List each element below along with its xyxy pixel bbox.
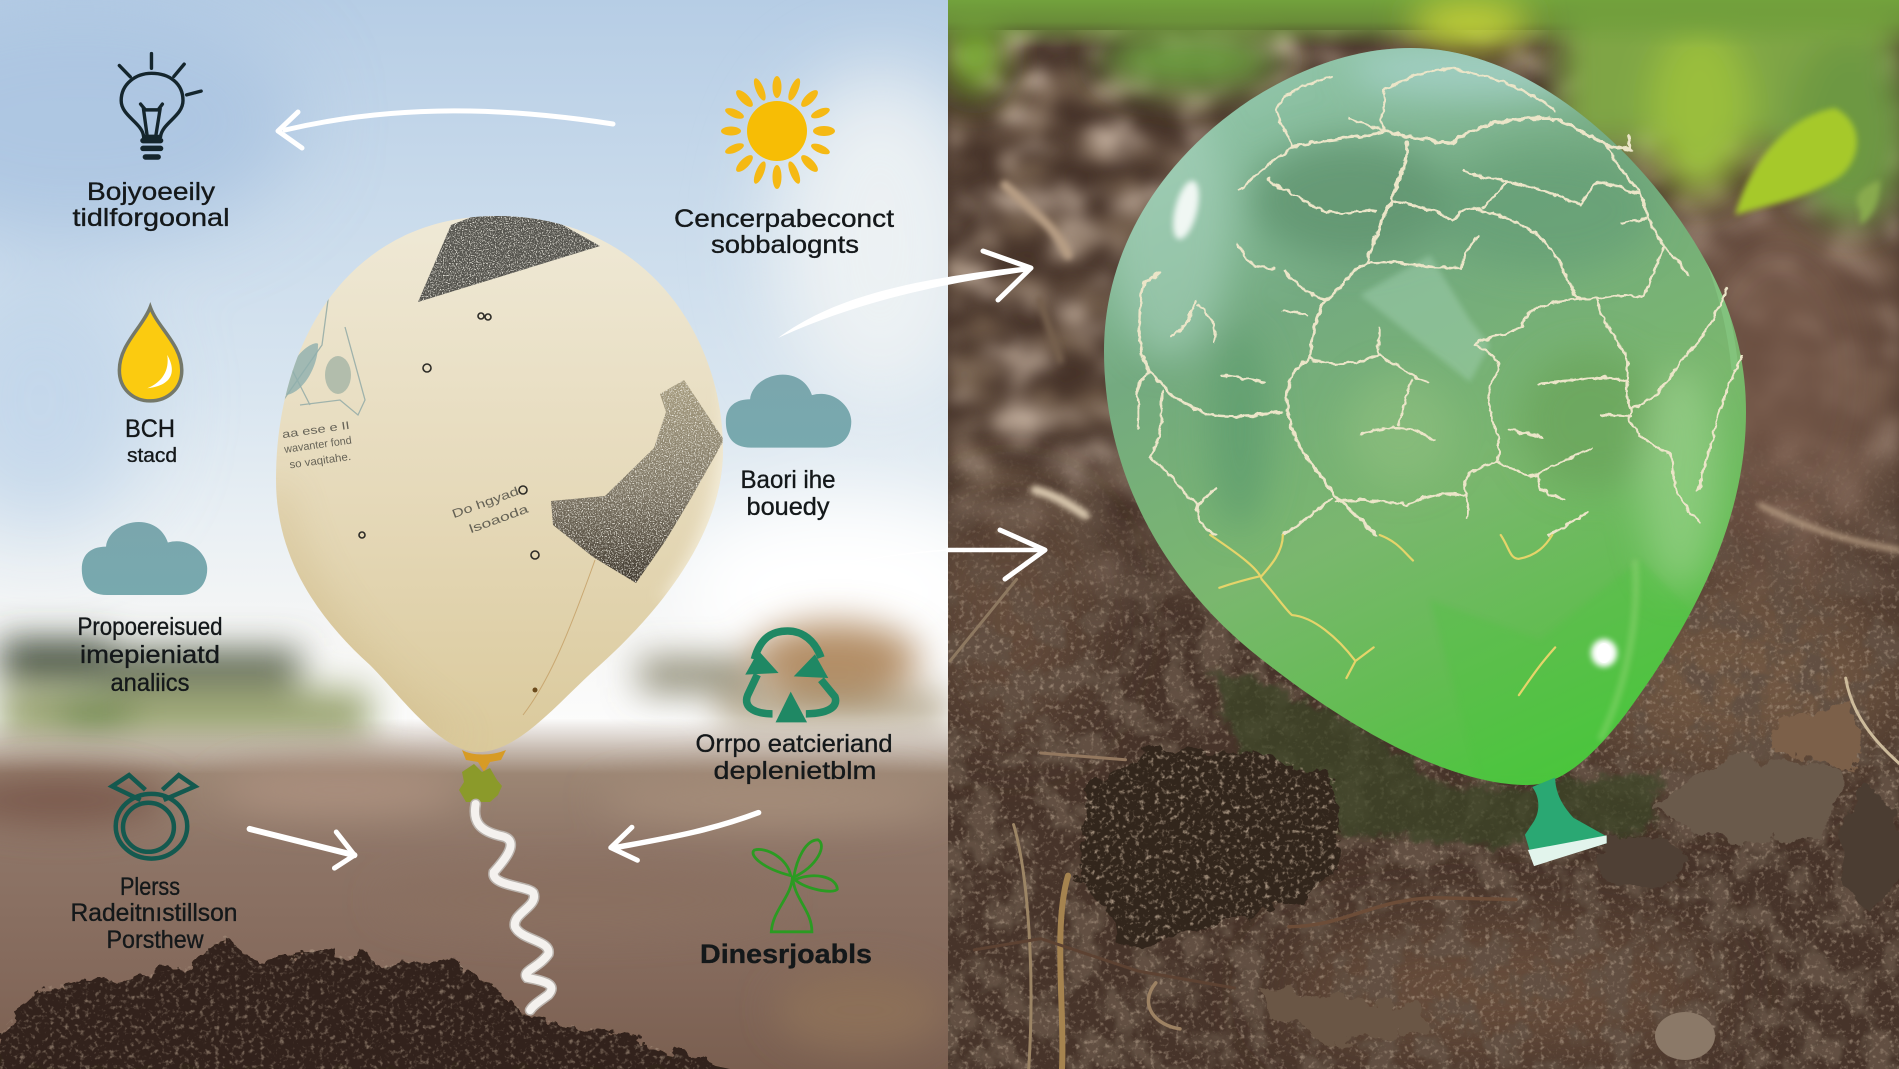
- icon: cloud right: [726, 375, 851, 448]
- label: Orrpo eatcieriand deplenietblm: [696, 730, 892, 785]
- label: Propoereisued imepieniatd analiics: Propoereisued: [78, 613, 222, 641]
- label: Baori ihe bouedy: [740, 466, 836, 521]
- panel: degrading green balloon in soil: [930, 0, 1899, 1069]
- label: Plerss Radeitnıstillson Porsthew: Radeitnıstillson: [70, 899, 238, 927]
- blurred twigs: [1005, 185, 1899, 550]
- arrow: ring to string: [250, 829, 354, 868]
- crack network upper: [1138, 68, 1743, 535]
- label: BCH stacd: [125, 415, 177, 467]
- green balloon body with cracks: [1104, 40, 1746, 785]
- balloon: cream, intact: [260, 212, 740, 752]
- label: Orrpo eatcieriand deplenietblm: deplenietblm: [714, 757, 876, 785]
- icon: sprout: [753, 840, 837, 932]
- soil background: [930, 0, 1899, 1069]
- label: Dinesrjoabls: Dinesrjoabls: [700, 939, 872, 969]
- thin map and leaf drawings: [284, 299, 366, 416]
- twigs and rootlets: [950, 579, 1899, 1069]
- label: Baori ihe bouedy: bouedy: [746, 493, 830, 521]
- label: Propoereisued imepieniatd analiics: imepieniatd: [80, 641, 220, 669]
- icon: cloud left: [82, 522, 207, 595]
- bright leaf: [1735, 108, 1880, 225]
- label: BCH stacd: BCH: [125, 415, 175, 443]
- label: Plerss Radeitnıstillson Porsthew: Plerss: [120, 873, 180, 901]
- label: Orrpo eatcieriand deplenietblm: Orrpo eatcieriand: [696, 730, 892, 758]
- label: Plerss Radeitnıstillson Porsthew: [70, 873, 238, 954]
- icon: sun: [721, 76, 835, 189]
- label: Bojyoeeily tidlforgoonal: [72, 178, 230, 232]
- arrow: recycling to string: [611, 813, 759, 860]
- arrow: balloon to cracked balloon lower: [770, 530, 1045, 590]
- sky background: [0, 0, 948, 654]
- label: Cencerpabeconct sobbalognts: [674, 205, 894, 259]
- balloon knot and neck: [459, 750, 506, 802]
- icon: light bulb: [119, 54, 201, 157]
- speckled patch: right: [551, 380, 724, 583]
- icon: recycling symbol: [745, 631, 836, 722]
- label: Cencerpabeconct sobbalognts: Cencerpabeconct: [674, 205, 894, 233]
- blurred foliage: [948, 0, 1899, 225]
- ground: [0, 700, 948, 1069]
- label: Bojyoeeily tidlforgoonal: Bojyoeeily: [87, 178, 216, 206]
- label: Propoereisued imepieniatd analiics: [78, 613, 222, 697]
- arrow: balloon to cracked balloon upper: [778, 251, 1031, 338]
- icon: oil drop: [119, 307, 182, 401]
- label: Plerss Radeitnıstillson Porsthew: Porsthew: [106, 926, 204, 954]
- label: BCH stacd: stacd: [127, 445, 177, 467]
- balloon printed text: [283, 421, 352, 468]
- balloon printed text: wavanter fond: [283, 435, 353, 456]
- arrow: sun to bulb: [278, 111, 613, 148]
- highlights: [1168, 178, 1636, 740]
- label: Cencerpabeconct sobbalognts: sobbalognts: [711, 231, 859, 259]
- icon: ring with horns: [112, 775, 195, 859]
- crack network lower: [1210, 535, 1555, 695]
- label: Bojyoeeily tidlforgoonal: tidlforgoonal: [72, 204, 230, 232]
- balloon: cream, intact: Do hgyad: [450, 484, 521, 521]
- soil pile: [0, 935, 730, 1069]
- moss behind neck: [1210, 670, 1660, 845]
- blurred treeline and field: [0, 622, 948, 740]
- panel: intact balloon in sky: [0, 0, 1010, 1069]
- white curly string: [475, 804, 551, 1010]
- label: Propoereisued imepieniatd analiics: analiics: [110, 669, 190, 697]
- soil clumps and stones: [1080, 705, 1899, 1060]
- balloon printed text: so vaqitahe.: [289, 451, 352, 471]
- balloon: cream, intact: lsoaoda: [467, 502, 531, 536]
- balloon printed text: aa ese e II: [281, 420, 350, 441]
- label: Baori ihe bouedy: Baori ihe: [740, 466, 836, 494]
- balloon nozzle: [1525, 778, 1607, 866]
- speckled patch: top: [418, 212, 600, 302]
